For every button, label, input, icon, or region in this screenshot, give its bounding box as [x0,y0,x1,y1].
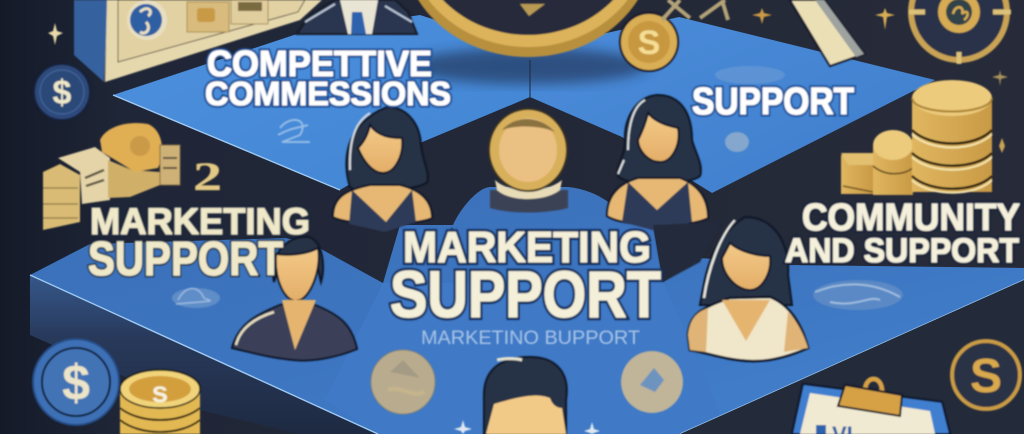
icon: gold S badge [952,341,1020,409]
icon: woman, lower right [688,217,808,361]
heading: competitive commissions: COMMESSIONS [205,75,451,112]
heading: marketing support, left: MARKETING [90,201,310,242]
icon: money bundles [43,123,180,230]
icon: number 2: 2 [193,154,222,199]
panel: lower main platform [30,187,1024,434]
heading: marketing support, center [390,223,661,331]
panel: competitive commissions platform [113,15,530,190]
platform side face: lower left [30,275,378,434]
icon: center gold medallion figure [489,109,568,212]
icon: gold coin stack [120,370,200,434]
heading: marketing support, center: MARKETING [403,223,651,272]
panel: center lighter platform [325,282,720,434]
icon: target ring [909,0,1011,64]
panel: support platform [530,17,935,193]
icon: gold S badge: S [970,350,1002,403]
icon: right coin stacks [841,80,992,195]
shadow under big ring [408,48,648,84]
heading: support: SUPPORT [692,81,854,123]
icon: gold coin stack: s [152,376,168,409]
icon: left dollar badge: $ [53,74,72,112]
heading: marketing support, left: SUPPORT [88,233,283,286]
heading: marketing support, left [88,201,310,286]
icons: faint panel glyphs [172,66,903,310]
icon: left cream coin [371,350,435,414]
icon: magnifier handle [790,0,864,66]
icon: gold dollar coin [619,12,679,72]
icon: blue dollar badge, lower left: $ [62,355,90,411]
heading: community and support [785,197,1020,270]
icon: woman, upper right [607,95,708,232]
icon: left dollar badge [34,64,90,120]
icon: gold dollar coin: S [638,24,660,62]
icon: ladder struts [662,0,728,20]
decorative seams [30,95,1024,434]
heading: marketing support, center: SUPPORT [390,257,661,331]
icon: man, bottom center [484,357,567,434]
icon: blue dollar badge, lower left [33,339,119,425]
heading: competitive commissions: COMPETTIVE [207,43,432,84]
caption: marketing support small: MARKETINO BUPPORT [421,328,640,349]
icon: dark band right of center [653,222,722,282]
icon: man, left [232,237,357,361]
icon: right cream coin [621,351,683,413]
icon: large gold ring [402,0,654,57]
icon: clipboard [792,379,950,434]
icon: certificate panel [74,0,322,82]
icon: woman, upper left [333,107,432,232]
right lower dark corner [680,280,1024,434]
heading: competitive commissions [205,43,451,112]
icon: businessman [297,0,417,34]
